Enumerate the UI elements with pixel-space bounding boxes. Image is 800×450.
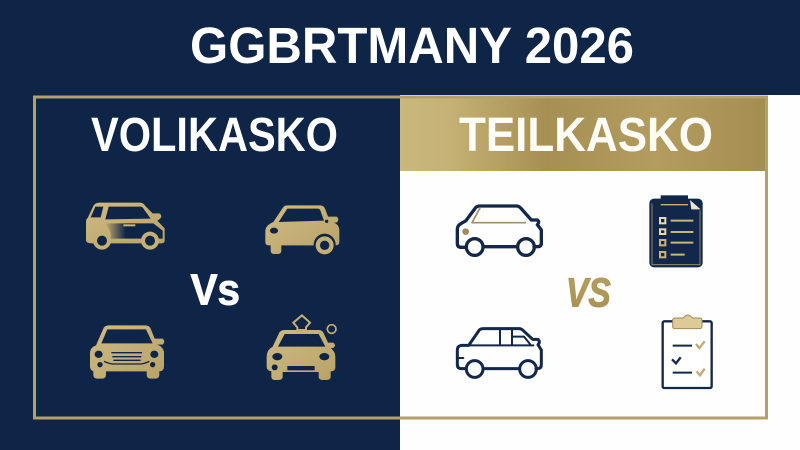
icon: outline car two <box>457 329 541 377</box>
panel: volikasko icons <box>86 203 339 380</box>
panel: teilkasko icons <box>457 195 712 388</box>
label: white Vs: Vs <box>191 266 240 315</box>
heading: volikasko: VOLIKASKO <box>91 109 338 162</box>
icon: outline car one <box>457 206 541 255</box>
panel: teilkasko header <box>400 97 768 171</box>
icon: front view sedan <box>90 325 164 379</box>
icon: hatchback <box>265 205 339 256</box>
panel: right white background <box>400 95 800 450</box>
heading: teilkasko: TEILKASKO <box>459 109 713 162</box>
title: GGBRTMANY 2026 <box>190 17 634 74</box>
icon: white clipboard checklist <box>663 315 712 388</box>
label: gold VS: VS <box>566 270 611 316</box>
icon: dark clipboard checklist <box>649 195 703 267</box>
icon: side view van <box>86 203 165 250</box>
panel frame: gold outline <box>34 97 766 418</box>
icon: front view car with roof sign <box>267 315 336 380</box>
